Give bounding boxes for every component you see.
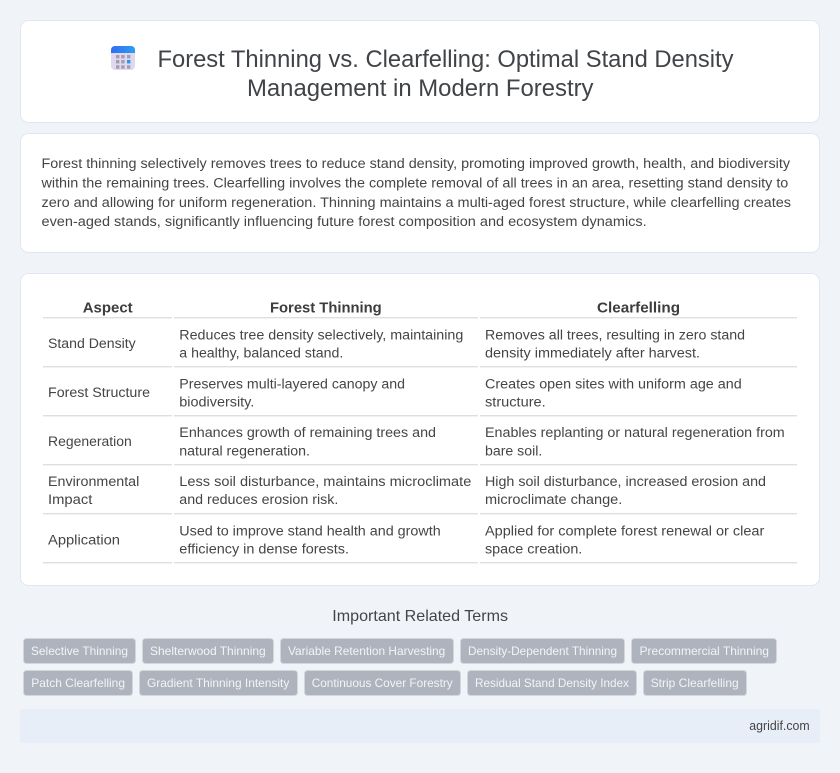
table row: stand density: density immediately after harvest. <box>485 345 700 361</box>
table row: regeneration: Regeneration <box>48 434 132 450</box>
tag: shelterwood thinning: Shelterwood Thinning <box>150 644 266 658</box>
heading: important related terms: Important Related Terms <box>332 608 508 625</box>
table row: regeneration: Enables replanting or natural regeneration from <box>485 425 785 441</box>
table row: environmental impact: microclimate change. <box>485 492 622 508</box>
table row: environmental impact: Environmental <box>48 474 139 490</box>
table row: stand density: Stand Density <box>48 336 137 352</box>
tag group: related terms <box>24 638 776 696</box>
table row: stand density: a healthy, balanced stand. <box>179 345 343 361</box>
table row: forest structure: structure. <box>485 394 546 410</box>
table header: Aspect <box>83 300 133 316</box>
text block: intro <box>40 156 791 230</box>
table row: application: Applied for complete forest renewal or clear <box>485 523 765 539</box>
table row: environmental impact <box>48 474 766 508</box>
table row: application: efficiency in dense forests. <box>179 541 349 557</box>
tag: patch clearfelling <box>24 670 132 696</box>
table row: environmental impact: and reduces erosion risk. <box>179 492 338 508</box>
tag: continuous cover forestry <box>304 670 460 696</box>
table row: regeneration: Enhances growth of remaining trees and <box>179 425 436 441</box>
table header: Forest Thinning <box>270 300 382 316</box>
tag: precommercial thinning <box>632 638 776 664</box>
table row: environmental impact: High soil disturbance, increased erosion and <box>485 474 766 490</box>
text block: intro: Forest thinning selectively removes trees to reduce stand density, promoting improved growth, health, and biodiversity <box>42 156 791 172</box>
text block: intro: even-aged stands, significantly influencing future forest composition and ecosystem dynamics. <box>42 214 647 230</box>
footer: agridif.com <box>749 719 810 733</box>
table row: stand density: Reduces tree density selectively, maintaining <box>179 327 463 343</box>
table header <box>83 300 680 316</box>
text block: intro: within the remaining trees. Clearfelling involves the complete removal of all trees in an area, resetting stand density to <box>40 175 788 191</box>
tag: gradient thinning intensity: Gradient Thinning Intensity <box>147 676 289 690</box>
table row: forest structure: biodiversity. <box>179 394 254 410</box>
title: Management in Modern Forestry <box>247 75 594 102</box>
tag: precommercial thinning: Precommercial Thinning <box>640 644 769 658</box>
table row: application: space creation. <box>485 541 582 557</box>
text block: intro: zero and allowing for uniform regeneration. Thinning maintains a multi-aged forest structure, while clearfelling creates <box>42 195 791 211</box>
table row: forest structure: Preserves multi-layered canopy and <box>179 376 405 392</box>
table row: stand density <box>48 327 745 361</box>
tag: residual stand density index: Residual Stand Density Index <box>475 676 629 690</box>
table row: forest structure: Creates open sites with uniform age and <box>485 376 742 392</box>
tag: continuous cover forestry: Continuous Cover Forestry <box>312 676 453 690</box>
table row: forest structure <box>48 376 742 410</box>
tag: gradient thinning intensity <box>140 670 298 696</box>
tag: residual stand density index <box>468 670 636 696</box>
tag: selective thinning: Selective Thinning <box>31 644 128 658</box>
title <box>158 46 734 102</box>
table header: Clearfelling <box>597 300 680 316</box>
table row: forest structure: Forest Structure <box>48 385 150 401</box>
panel: title card <box>20 20 820 122</box>
table row: application <box>48 523 765 557</box>
icon: calendar <box>111 46 135 70</box>
table row: application: Application <box>48 532 120 548</box>
table row: regeneration: bare soil. <box>485 443 542 459</box>
tag: strip clearfelling <box>644 670 746 696</box>
panel: intro paragraph <box>20 134 820 252</box>
table row: environmental impact: Less soil disturbance, maintains microclimate <box>179 474 471 490</box>
tag: strip clearfelling: Strip Clearfelling <box>651 676 739 690</box>
tag: variable retention harvesting <box>280 638 454 664</box>
table row: environmental impact: Impact <box>48 492 92 508</box>
table row: regeneration <box>48 425 785 459</box>
tag: density-dependent thinning: Density-Dependent Thinning <box>468 644 617 658</box>
table row: application: Used to improve stand health and growth <box>179 523 441 539</box>
tag: patch clearfelling: Patch Clearfelling <box>31 676 125 690</box>
footer <box>20 709 820 743</box>
tag: density-dependent thinning <box>460 638 624 664</box>
tag: variable retention harvesting: Variable Retention Harvesting <box>288 644 445 658</box>
table row: regeneration: natural regeneration. <box>179 443 310 459</box>
tag: shelterwood thinning <box>142 638 274 664</box>
panel: comparison table <box>20 274 820 586</box>
table row: stand density: Removes all trees, resulting in zero stand <box>485 327 745 343</box>
tag: selective thinning <box>24 638 136 664</box>
title: Forest Thinning vs. Clearfelling: Optimal Stand Density <box>158 46 734 73</box>
